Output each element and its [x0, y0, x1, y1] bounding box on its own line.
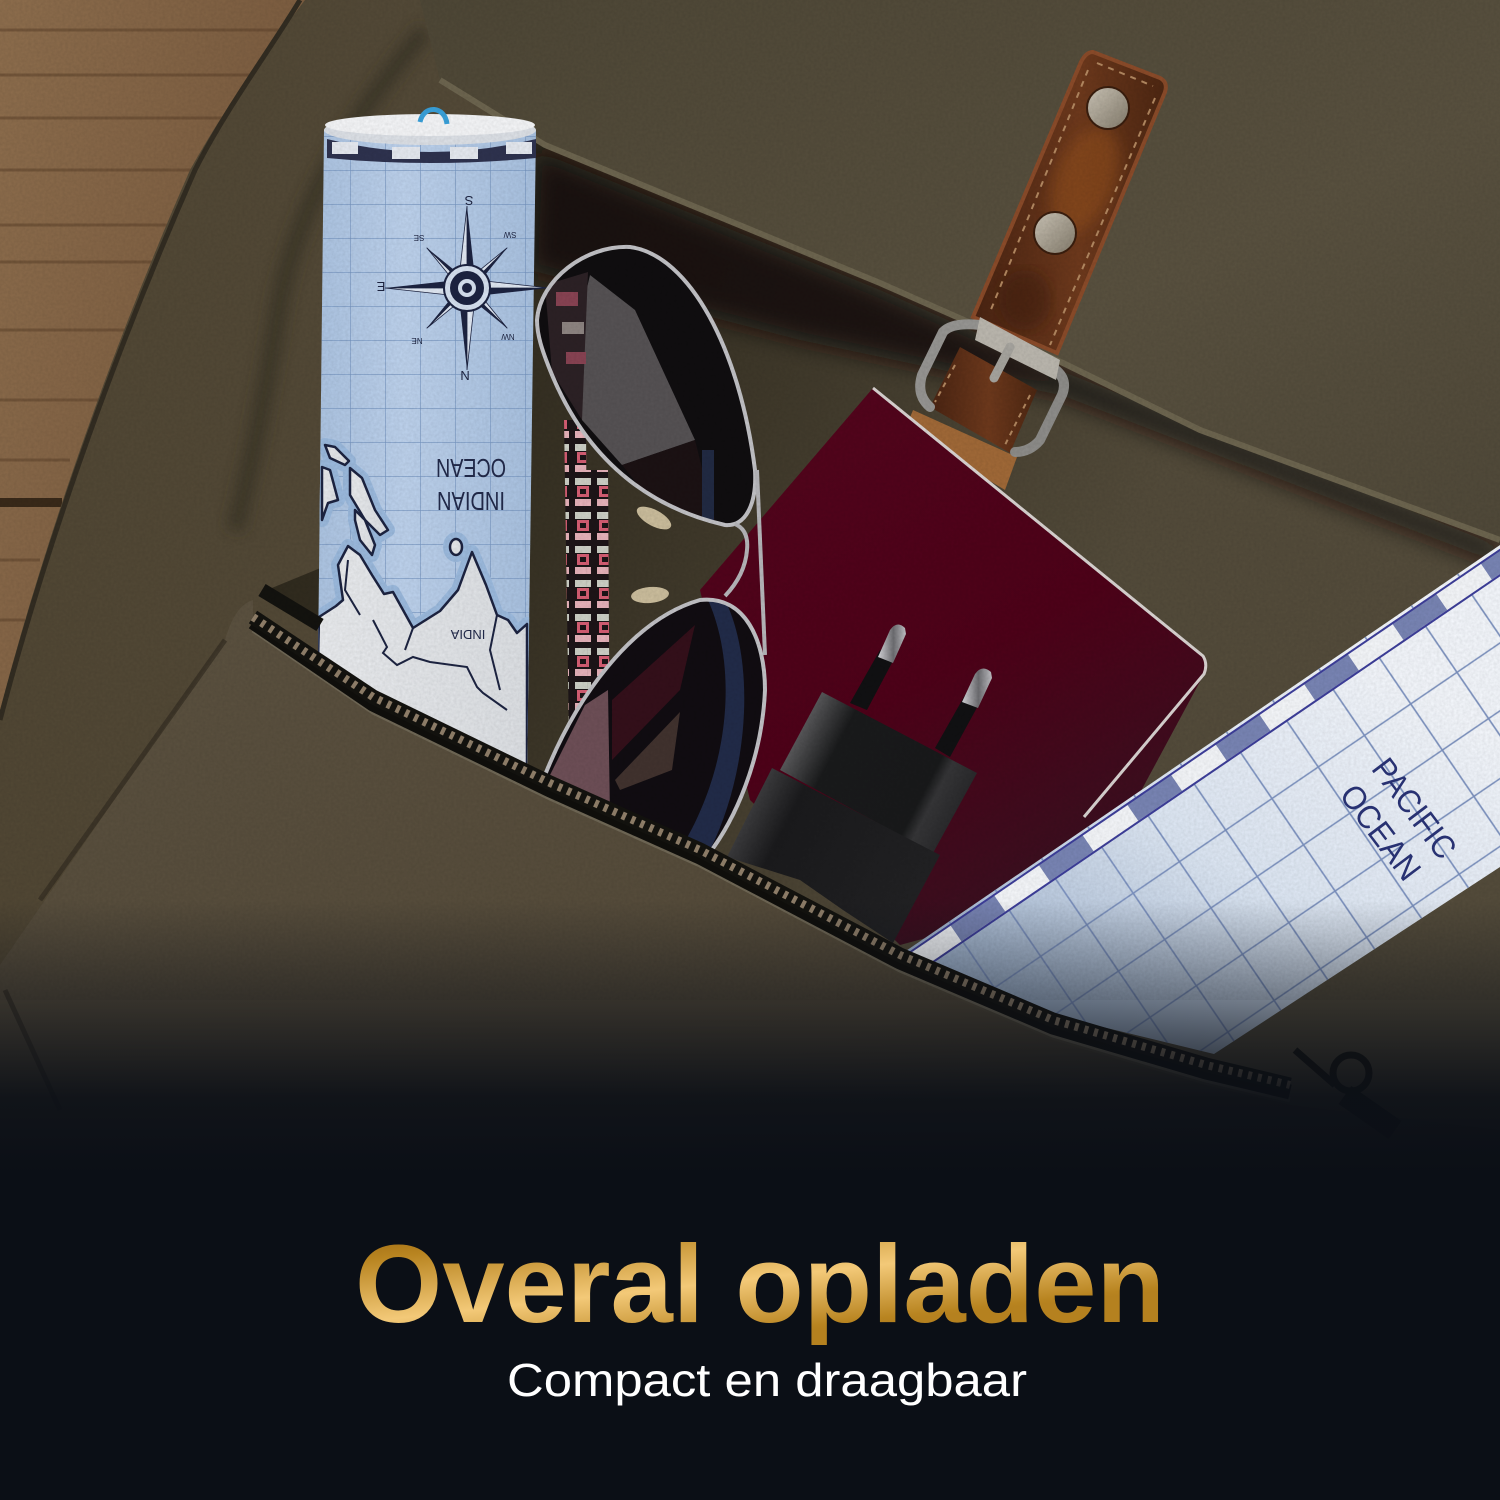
strap rivets: [1034, 87, 1129, 254]
ocean label: [436, 453, 506, 516]
footer panel: [0, 1174, 1500, 1500]
lower lens: [545, 600, 765, 855]
map landmasses: [318, 445, 527, 775]
compass rose: NW: [501, 332, 515, 341]
coastal halo: [318, 445, 527, 775]
pocket welt seam: [5, 640, 225, 1110]
roll border stripe: [909, 535, 1500, 970]
compass rose: N: [460, 368, 470, 383]
metal buckle: [920, 317, 1064, 452]
pacific ocean label: OCEAN: [1333, 777, 1428, 887]
tube lid: [324, 109, 536, 145]
compass rose: E: [376, 279, 385, 294]
pacific ocean label: PACIFIC: [1365, 751, 1464, 866]
zipper pull: [1295, 1050, 1395, 1130]
lanyard: [564, 420, 610, 800]
title: Overal opladen: [355, 1223, 1165, 1346]
canvas texture: [0, 0, 1500, 1000]
compass rose: SW: [503, 230, 516, 239]
country label: INDIA: [450, 627, 485, 642]
black charger: [727, 624, 992, 943]
plug pins: [850, 624, 992, 757]
compass rose: SE: [414, 233, 424, 242]
lower body: [727, 768, 940, 943]
nose pads: [630, 502, 675, 605]
upper lens: [537, 247, 755, 525]
sunglasses with lanyard: [537, 247, 765, 855]
tube border stripe: [327, 139, 536, 163]
compass rose: S: [464, 193, 473, 208]
leather strap with buckle: [905, 52, 1166, 490]
compass rose: [376, 193, 549, 383]
map artwork clipped to the tube: [318, 445, 527, 775]
shadow under flap: [530, 150, 1500, 565]
compass rose: NE: [411, 336, 423, 345]
front pocket: [0, 600, 1500, 1500]
frame bridge and temple arm: [725, 470, 765, 655]
bag interior behind the pocket: [262, 140, 1500, 1150]
map tube: [318, 109, 549, 775]
subtitle: Compact en draagbaar: [507, 1354, 1027, 1406]
dark fade into footer: [0, 900, 1500, 1175]
zipper: [253, 590, 1395, 1130]
strap lower end: [905, 347, 1037, 490]
passport: [700, 388, 1206, 945]
strap upper: [973, 52, 1166, 353]
ocean label: INDIAN: [437, 486, 505, 516]
wooden table background: [0, 0, 420, 760]
upper body: [780, 692, 977, 853]
pacific ocean label: [1333, 751, 1464, 887]
ocean label: OCEAN: [436, 453, 506, 483]
country borders: [345, 560, 507, 710]
rolled map: [900, 535, 1500, 1054]
bag flap: [420, 0, 1500, 540]
